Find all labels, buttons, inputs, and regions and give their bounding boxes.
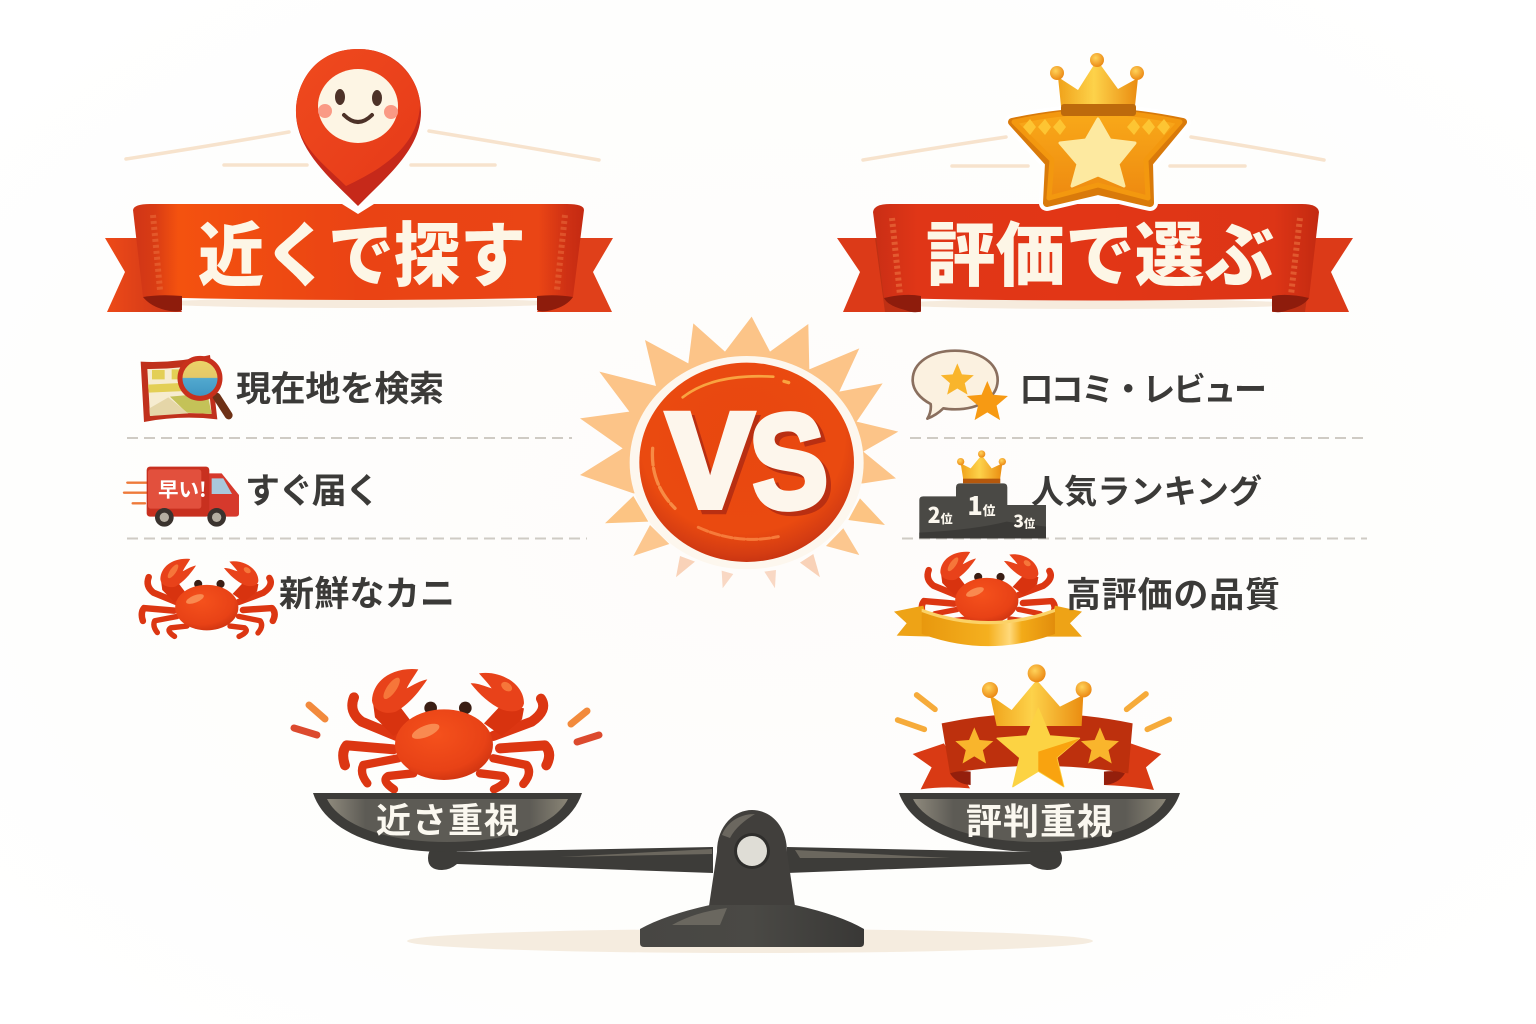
VS lettering (668, 385, 837, 543)
icon: delivery truck: 早い! (158, 474, 207, 503)
scale pivot (734, 833, 770, 869)
item text: 口コミ・レビュー: 口コミ・レビュー (1020, 363, 1267, 411)
icon: ranking podium with crown: 2 (928, 499, 941, 530)
icon: red crab (142, 559, 275, 636)
left pan (313, 793, 582, 852)
icon: delivery truck (124, 467, 239, 527)
icon: ranking podium with crown: 位 (1024, 515, 1036, 531)
white ring (630, 356, 864, 569)
icon: ranking podium with crown: 位 (941, 510, 953, 527)
sparks left (294, 705, 599, 742)
icon: ranking podium with crown (919, 450, 1046, 538)
icon: crowned gold star (1012, 53, 1183, 203)
item text: すぐ届く: すぐ届く (245, 463, 380, 514)
item text: 人気ランキング: 人気ランキング (1031, 465, 1262, 513)
icon: stars, crown and ribbon (898, 664, 1169, 790)
heading: 近くで探す: 近くで探す (198, 200, 526, 301)
item text: 現在地を検索: 現在地を検索 (236, 361, 444, 412)
ribbon banner right (837, 204, 1353, 312)
icon: ranking podium with crown: 3 (1013, 507, 1024, 532)
panel: right feature list (894, 351, 1280, 646)
item text: 高評価の品質: 高評価の品質 (1066, 567, 1280, 618)
heading: 評価で選ぶ: 評価で選ぶ (926, 200, 1274, 301)
pan label: 評判重視: 評判重視 (966, 793, 1113, 845)
VS lettering: V (672, 391, 756, 539)
icon: smiling location pin (296, 49, 421, 214)
scale pillar (709, 810, 795, 906)
ribbon banner left (105, 204, 613, 312)
icon: ranking podium with crown: 1 (967, 487, 983, 523)
VS lettering: S (750, 389, 837, 543)
decorative speed lines right (863, 137, 1324, 166)
panel: rating header (837, 53, 1353, 312)
icon: map with magnifier (141, 355, 229, 422)
sun rays (580, 317, 898, 588)
pan label: 近さ重視: 近さ重視 (376, 793, 519, 844)
item text: 新鮮なカニ: 新鮮なカニ (279, 566, 455, 617)
icon: speech bubble with stars (913, 351, 1008, 420)
decorative speed lines left (126, 131, 599, 165)
icon: ranking podium with crown: 位 (983, 500, 996, 519)
scale beam (428, 845, 713, 873)
balance scale (294, 664, 1180, 953)
disc highlights (652, 376, 789, 539)
panel: nearby search header (105, 49, 613, 312)
VS lettering: V (668, 387, 752, 535)
VS lettering: S (745, 385, 832, 539)
VS sunburst badge (580, 317, 898, 588)
panel: left feature list (124, 355, 455, 636)
right pan (899, 793, 1180, 852)
dashed row dividers (127, 438, 1367, 538)
orange disc (639, 363, 854, 562)
scale base (640, 905, 864, 947)
ground shadow (407, 929, 1093, 953)
icon: large crab (343, 669, 549, 789)
icon: crab on gold ribbon (894, 552, 1082, 646)
